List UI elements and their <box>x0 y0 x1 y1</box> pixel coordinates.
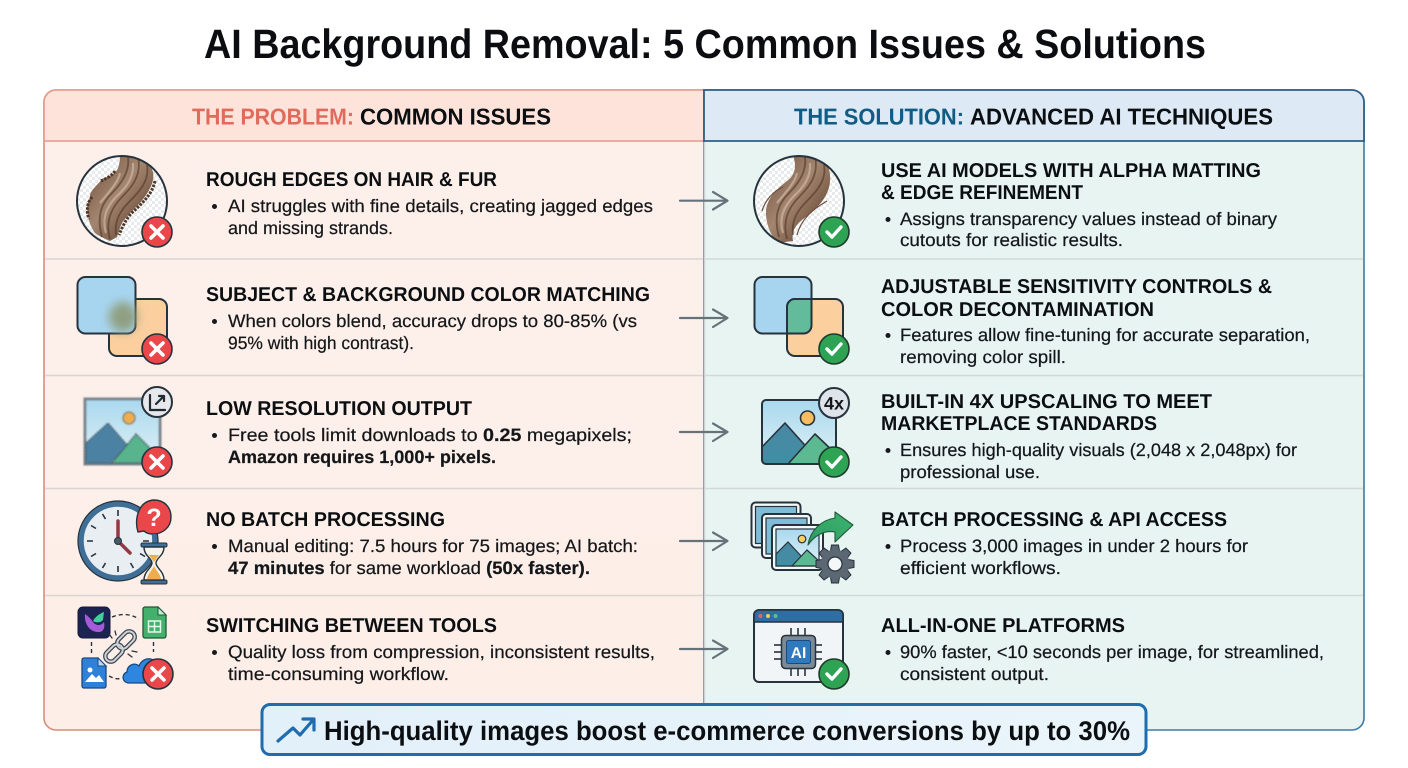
icon: success badge <box>819 447 849 477</box>
icon: success badge <box>819 334 849 364</box>
heading: ADJUSTABLE SENSITIVITY CONTROLS & <box>881 276 1272 298</box>
bullet text: 47 minutes for same workload (50x faster). <box>228 558 590 578</box>
row 2: sensitivity controls <box>680 276 1310 367</box>
icon: blending squares <box>78 277 167 356</box>
problem panel background <box>44 90 704 730</box>
icon: 4x badge: 4x <box>824 394 844 414</box>
icon: spreadsheet <box>143 607 166 638</box>
bullet text: cutouts for realistic results. <box>900 230 1123 250</box>
heading <box>881 391 1212 435</box>
bullet text <box>886 209 1277 250</box>
bullet text: Amazon requires 1,000+ pixels. <box>228 447 496 467</box>
bullet text <box>886 440 1297 482</box>
panel: the solution <box>680 90 1364 730</box>
icon: separated squares <box>754 277 843 356</box>
panel: the problem <box>44 90 704 730</box>
heading: BATCH PROCESSING & API ACCESS <box>881 509 1227 531</box>
heading: LOW RESOLUTION OUTPUT <box>206 398 472 420</box>
bullet text: Free tools limit downloads to 0.25 megapixels; <box>228 425 632 445</box>
bullet text <box>212 196 653 238</box>
row 5: switching tools <box>78 607 655 689</box>
heading <box>881 160 1261 204</box>
heading: & EDGE REFINEMENT <box>881 182 1083 204</box>
solution header band <box>704 90 1364 141</box>
heading: NO BATCH PROCESSING <box>206 509 445 531</box>
bullet text <box>212 536 638 578</box>
bullet text: Process 3,000 images in under 2 hours for <box>900 536 1248 556</box>
bullet text: removing color spill. <box>900 347 1066 367</box>
arrow <box>680 640 728 658</box>
arrow <box>680 310 728 327</box>
icon: resize badge <box>142 387 172 417</box>
icon: sharp picture <box>762 400 836 464</box>
heading: SWITCHING BETWEEN TOOLS <box>206 615 497 637</box>
icon: success badge <box>819 659 849 689</box>
icon: question bubble: ? <box>146 504 162 532</box>
heading: USE AI MODELS WITH ALPHA MATTING <box>881 160 1261 182</box>
bullet text: AI struggles with fine details, creating jagged edges <box>228 196 653 216</box>
bullet text <box>212 642 655 684</box>
icon: image file <box>82 658 106 688</box>
icon: broken link <box>103 629 137 664</box>
heading: BUILT-IN 4X UPSCALING TO MEET <box>881 391 1212 413</box>
row 1: alpha matting <box>680 155 1277 250</box>
bullet text <box>212 311 637 353</box>
problem header band: COMMON ISSUES <box>360 104 551 130</box>
bullet text: Manual editing: 7.5 hours for 75 images; AI batch: <box>228 536 638 556</box>
icon: error badge <box>142 217 172 247</box>
icon: success badge <box>819 217 849 247</box>
icon: AI app window <box>754 610 843 682</box>
solution header band: ADVANCED AI TECHNIQUES <box>970 104 1273 130</box>
icon: AI app window: AI <box>791 645 806 662</box>
bullet text: and missing strands. <box>228 218 393 238</box>
icon: smooth hair cutout <box>754 155 844 246</box>
icon: error badge <box>142 334 172 364</box>
bullet text: 95% with high contrast). <box>228 333 414 353</box>
bullet text <box>886 536 1248 578</box>
problem header band <box>44 90 704 141</box>
heading: ROUGH EDGES ON HAIR & FUR <box>206 169 498 191</box>
row 5: all-in-one <box>680 610 1324 689</box>
icon: jagged hair cutout <box>77 155 167 246</box>
row 4: no batch processing <box>78 500 638 584</box>
arrow <box>680 532 728 550</box>
bullet text: professional use. <box>900 462 1040 482</box>
banner text: High-quality images boost e-commerce conversions by up to 30% <box>324 716 1130 746</box>
bullet text: consistent output. <box>900 664 1049 684</box>
row 2: color matching <box>78 277 650 364</box>
icon: trend arrow <box>278 719 314 741</box>
icon: error badge <box>143 659 173 689</box>
bullet text <box>212 425 632 467</box>
icon: hourglass <box>141 534 167 584</box>
bullet text: Features allow fine-tuning for accurate separation, <box>900 325 1310 345</box>
icon: gear <box>808 537 862 591</box>
heading: SUBJECT & BACKGROUND COLOR MATCHING <box>206 284 650 306</box>
bullet text: When colors blend, accuracy drops to 80-85% (vs <box>228 311 637 331</box>
row 4: batch processing <box>680 502 1248 591</box>
icon: question bubble <box>137 500 171 534</box>
icon: pixelated picture <box>85 399 160 464</box>
icon: app tile <box>78 607 110 638</box>
bullet text: 90% faster, <10 seconds per image, for streamlined, <box>900 642 1324 662</box>
row 3: upscaling <box>680 388 1297 482</box>
row 1: rough edges <box>77 155 653 247</box>
bullet text: Assigns transparency values instead of binary <box>900 209 1277 229</box>
bullet text: time-consuming workflow. <box>228 664 449 684</box>
solution panel background <box>704 90 1364 730</box>
row 3: low resolution <box>85 387 632 477</box>
heading: ALL-IN-ONE PLATFORMS <box>881 615 1125 637</box>
bullet text: efficient workflows. <box>900 558 1061 578</box>
bullet text: Quality loss from compression, inconsistent results, <box>228 642 655 662</box>
problem header band: THE PROBLEM: <box>192 104 354 130</box>
dashed connectors <box>92 615 154 679</box>
heading: MARKETPLACE STANDARDS <box>881 413 1157 435</box>
bullet text <box>886 642 1324 684</box>
bullet text <box>886 325 1310 367</box>
icon: error badge <box>142 447 172 477</box>
title: AI Background Removal: 5 Common Issues & Solutions <box>204 21 1206 67</box>
heading <box>881 276 1272 321</box>
callout: conversion banner <box>262 704 1146 754</box>
icon: 4x badge <box>819 388 849 418</box>
icon: cloud <box>123 659 158 683</box>
solution header band: THE SOLUTION: <box>794 104 964 130</box>
icon: clock <box>78 501 158 581</box>
heading: COLOR DECONTAMINATION <box>881 299 1154 321</box>
icon: green arrow <box>808 512 853 545</box>
arrow <box>680 424 728 441</box>
icon: image stack <box>752 502 823 570</box>
bullet text: Ensures high-quality visuals (2,048 x 2,048px) for <box>900 440 1297 460</box>
arrow <box>680 192 728 210</box>
